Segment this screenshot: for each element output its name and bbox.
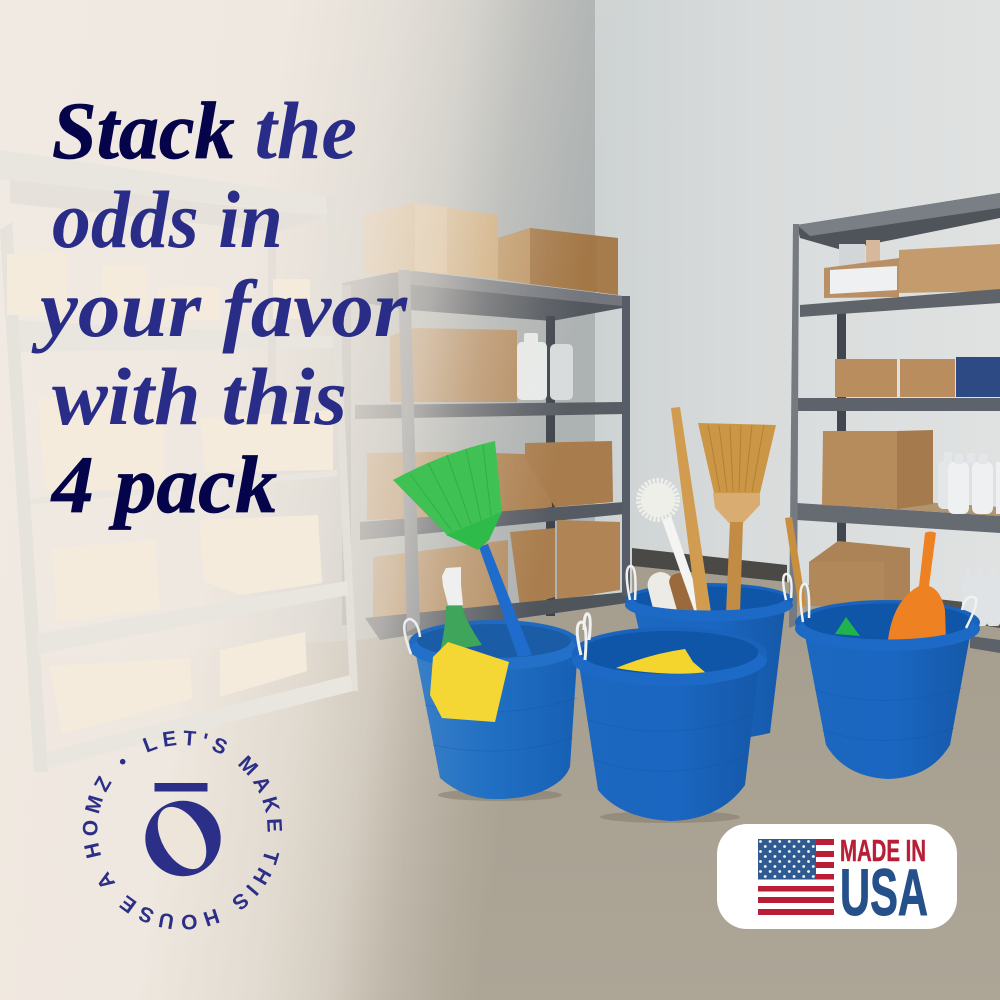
bucket: front with yellow cloth [572,614,767,823]
box: large carton [822,430,933,509]
tool: tan broom [698,423,776,613]
box: top right carton [498,228,618,295]
shelving unit: right rack with boxes [789,193,1000,653]
tool: wooden stick [785,517,806,610]
upright: right rack post [789,224,799,628]
badge: made in USA [717,824,957,929]
bottles: floor group [962,568,1000,626]
items: top shelf containers [824,240,1000,298]
upright: front post [398,270,420,632]
tool: toilet brush [639,481,704,613]
box: top left carton [363,203,498,279]
tool: wooden pole [671,407,711,613]
box: middle carton [390,328,517,402]
box: floor carton [809,541,910,606]
tool: orange scoop [888,532,946,640]
rope handles: rear bucket [627,566,792,600]
spray bottle [440,567,482,652]
bucket: rear with brushes [625,407,793,740]
made in text: MADE IN [840,833,926,868]
USA text: USA [840,855,928,929]
yellow cloth: front bucket [616,649,706,674]
logo badge: circular tagline [82,730,282,930]
bottles: white row [938,452,1000,514]
rope handles: front bucket [577,614,590,660]
box: bottom shelf cartons [373,520,620,630]
bucket: right with scoop [785,517,980,779]
box: shelf two cartons [835,359,955,397]
bucket: left with green broom [393,441,579,801]
title line 5: 4 pack [50,439,277,530]
yellow cloth: left bucket [430,642,509,722]
logo bar [154,783,208,792]
rope handles: right bucket [800,584,976,628]
tool: green funnel [835,617,860,636]
jugs: white containers [517,333,573,400]
shelving unit: centre rack with boxes [342,203,630,640]
rope handle: left bucket [404,619,420,654]
ghost boxes: faded cartons [7,254,333,734]
title [31,85,408,530]
title line 1: Stack the [52,85,357,176]
box: third shelf cartons [367,441,613,520]
dot separator [120,759,125,764]
title line 3: your favor [31,263,408,354]
tool: green broom [393,441,532,657]
logo ring [145,799,221,877]
ghost shelving: faded left rack [0,150,358,772]
title line 2: odds in [52,174,283,265]
icon: american flag [758,839,834,915]
title line 4: with this [52,351,347,442]
circular text: LET'S MAKE THIS HOUSE A HOMZ [82,730,282,930]
tool: white bristle brush [645,569,699,620]
box: navy container [956,357,1000,397]
